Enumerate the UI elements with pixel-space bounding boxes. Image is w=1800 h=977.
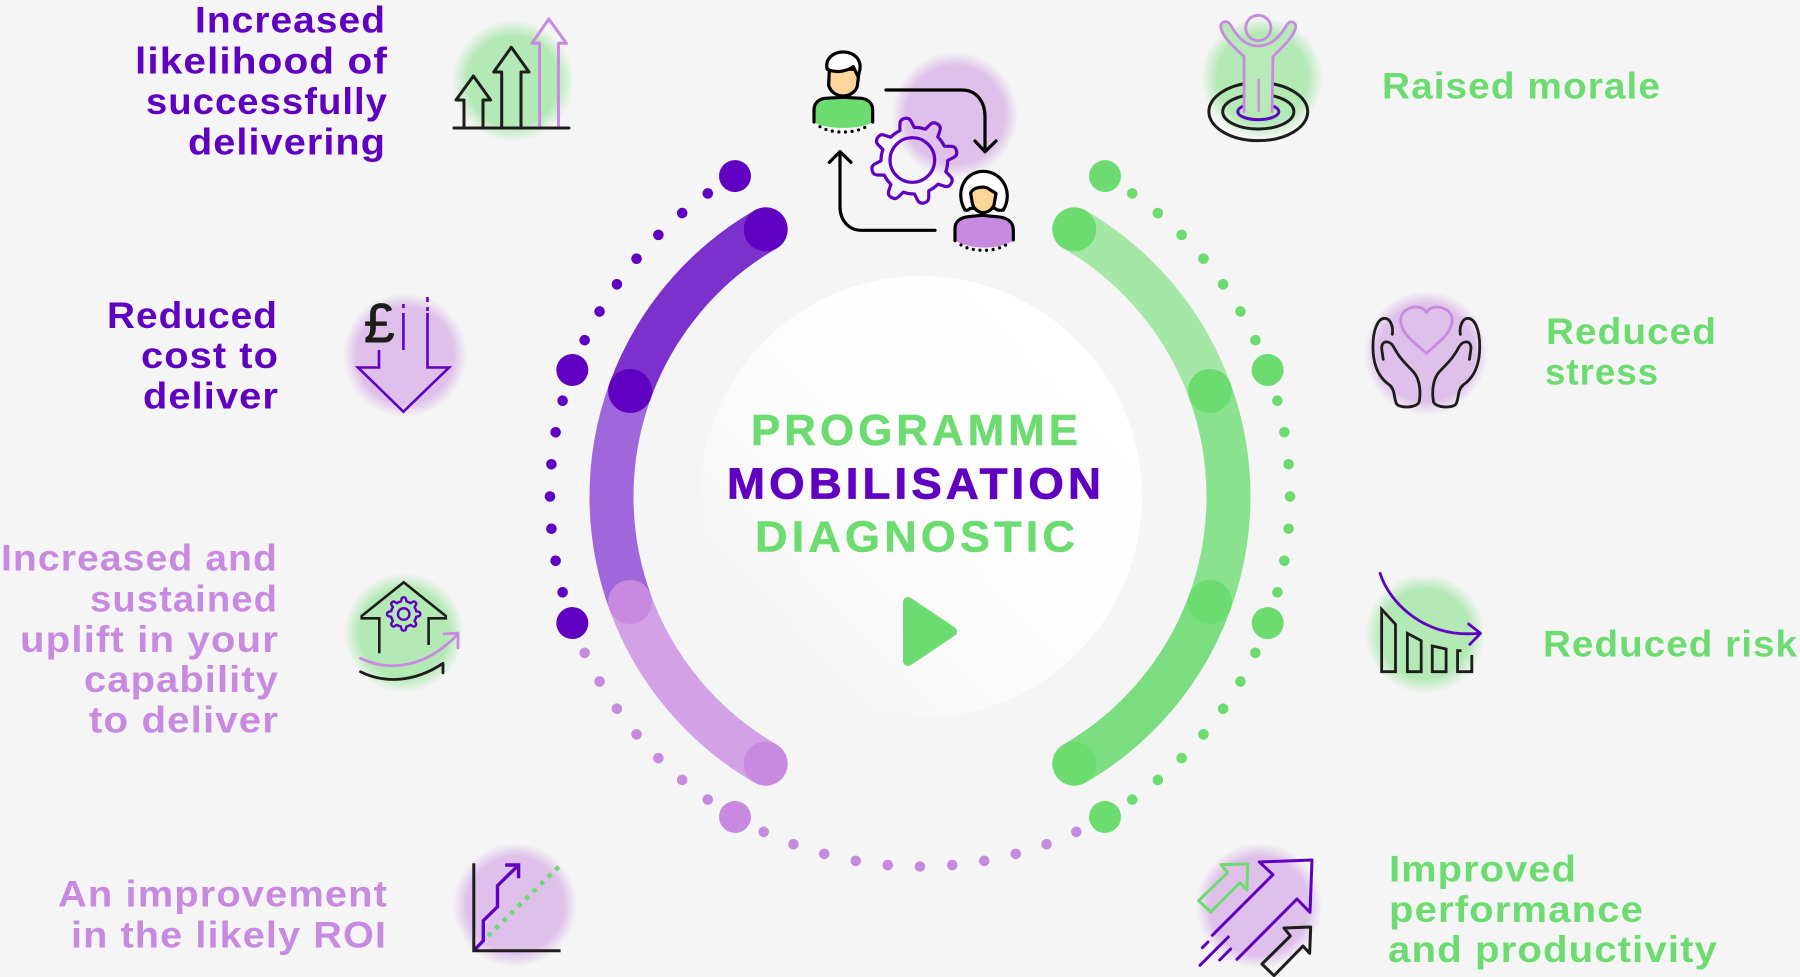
icon: house arrow with gear (344, 573, 464, 693)
thick ring: right green arc (1052, 207, 1232, 786)
label: Improved performance and productivity: performance (1389, 889, 1644, 930)
label: Increased and sustained uplift in your capability to deliver: to deliver (89, 700, 279, 741)
dotted ring: light purple lower (578, 646, 1083, 872)
title: Programme Mobilisation Diagnostic: PROGRAMME (751, 406, 1082, 455)
label: Increased and sustained uplift in your capability to deliver: capability (84, 659, 279, 700)
icon: people and gear cycle (814, 52, 1018, 250)
dotted ring: dark purple upper left (545, 154, 757, 644)
label: Raised morale: Raised morale (1382, 66, 1661, 107)
label: Improved performance and productivity: and productivity (1388, 929, 1718, 970)
label: An improvement in the likely ROI: in the likely ROI (71, 914, 387, 955)
woman figure (955, 171, 1013, 250)
label: Reduced cost to deliver: cost to (141, 335, 279, 376)
label: Increased and sustained uplift in your capability to deliver: uplift in your (20, 619, 279, 660)
gear (869, 116, 959, 206)
label: Improved performance and productivity (1388, 848, 1718, 970)
title: Programme Mobilisation Diagnostic: DIAGNOSTIC (755, 513, 1079, 562)
thick ring: left purple arc (608, 207, 788, 786)
label: Reduced cost to deliver: deliver (143, 376, 279, 417)
label: Reduced risk: Reduced risk (1543, 624, 1798, 665)
icon: rising arrows (452, 19, 574, 142)
label: Increased and sustained uplift in your capability to deliver: Increased and (1, 538, 278, 579)
icon: pound with down arrow: £ (364, 292, 395, 354)
label: Reduced cost to deliver: Reduced (107, 295, 278, 336)
label: Increased likelihood of successfully delivering: successfully (146, 81, 388, 122)
label: An improvement in the likely ROI (58, 874, 388, 955)
cycle arrows (829, 90, 996, 230)
label: Increased likelihood of successfully delivering (135, 0, 388, 163)
icon: hands holding heart (1364, 291, 1488, 415)
label: An improvement in the likely ROI: An improvement (58, 874, 388, 915)
label: Increased likelihood of successfully delivering: delivering (188, 122, 386, 163)
dotted ring: green right (1083, 154, 1295, 839)
label: Reduced stress: stress (1545, 352, 1659, 393)
man figure (814, 52, 873, 132)
icon: ROI line chart (453, 843, 577, 967)
label: Increased likelihood of successfully delivering: Increased (195, 0, 386, 41)
label: Reduced stress (1545, 311, 1717, 393)
icon: upward arrows performance (1196, 843, 1322, 976)
icon: falling bars with curve (1365, 573, 1485, 694)
label: Reduced stress: Reduced (1546, 311, 1717, 352)
icon: play triangle (908, 602, 952, 661)
label: Increased and sustained uplift in your capability to deliver: sustained (90, 578, 278, 619)
central white circle (700, 276, 1142, 718)
title: Programme Mobilisation Diagnostic: MOBILISATION (727, 459, 1105, 508)
icon: person on target raised morale (1201, 15, 1323, 141)
title: Programme Mobilisation Diagnostic (727, 406, 1105, 562)
label: Increased likelihood of successfully delivering: likelihood of (135, 40, 388, 82)
icon: pound with down arrow (343, 292, 467, 417)
label: Reduced cost to deliver (107, 295, 279, 417)
label: Improved performance and productivity: Improved (1389, 848, 1577, 889)
label: Increased and sustained uplift in your capability to deliver (1, 538, 279, 741)
